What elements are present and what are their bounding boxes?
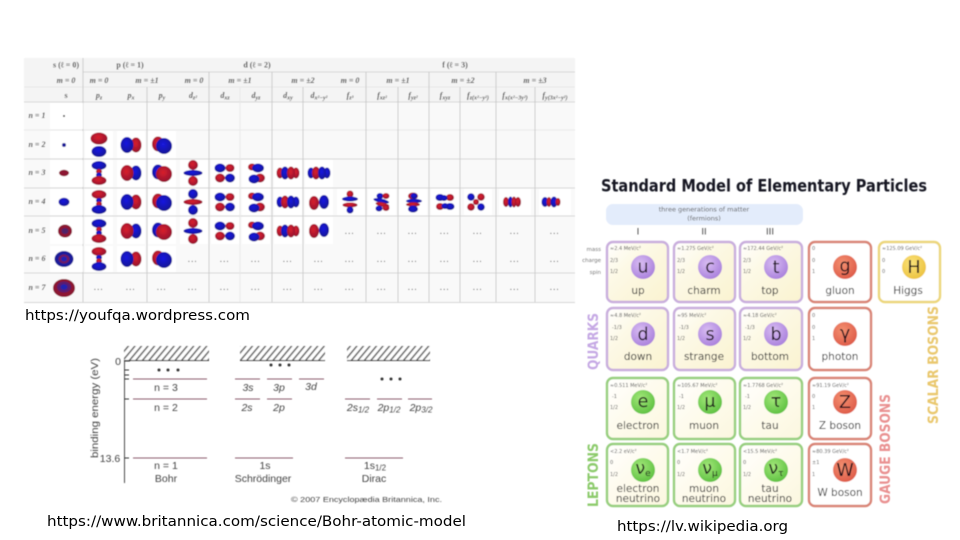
card: W boson: ±1	[812, 460, 819, 466]
table header: angular momentum and orbital names: y	[162, 96, 166, 102]
card: bottom quark: bottom	[751, 351, 789, 363]
row labels: principal quantum number n: n = 5	[28, 226, 46, 235]
ellipsis markers for unlisted orbitals: ...	[440, 256, 450, 264]
ellipsis markers for unlisted orbitals: ...	[251, 256, 261, 264]
ellipsis markers for unlisted orbitals: ...	[345, 228, 355, 236]
card: up quark: up	[631, 285, 645, 297]
property row labels: charge	[582, 258, 602, 264]
ellipsis markers for unlisted orbitals: ...	[473, 256, 483, 264]
card: tau neutrino: tau	[761, 483, 779, 495]
table header: angular momentum and orbital names: d	[220, 91, 224, 100]
card: muon neutrino: <1.7 MeV/c²	[677, 449, 708, 455]
table header: angular momentum and orbital names: s (ℓ = 0)	[53, 60, 79, 70]
energy axis	[89, 356, 130, 483]
ellipsis markers for unlisted orbitals: ...	[345, 256, 355, 264]
card: tau neutrino: ν	[768, 459, 778, 479]
table header: angular momentum and orbital names: m = ±2	[451, 76, 475, 85]
card: bottom quark: ≈4.18 GeV/c²	[743, 313, 777, 319]
Dirac column labels: Dirac	[362, 473, 386, 485]
table header: angular momentum and orbital names	[53, 60, 568, 102]
row labels: principal quantum number n: n = 1	[28, 111, 46, 120]
card: gluon: 0	[812, 258, 815, 264]
card: strange quark: 1/2	[677, 336, 685, 342]
Schrödinger column labels: Schrödinger	[235, 473, 292, 485]
card: tau neutrino	[740, 444, 802, 506]
card: top quark: 1/2	[743, 269, 751, 275]
card: gluon: g	[839, 256, 851, 276]
energy axis: binding energy (eV)	[89, 358, 101, 458]
card: photon: 1	[812, 336, 815, 342]
card: muon neutrino: μ	[712, 469, 718, 479]
card: W boson: ≈80.39 GeV/c²	[812, 449, 849, 455]
card: down quark: ≈4.8 MeV/c²	[610, 313, 641, 319]
card: muon: muon	[689, 420, 719, 432]
card: electron: -1	[612, 394, 617, 400]
card: W boson: 1	[812, 472, 815, 478]
Schrödinger column labels: 3d	[305, 381, 318, 393]
card: electron neutrino	[607, 444, 668, 506]
card: muon neutrino: 0	[677, 460, 680, 466]
table header: angular momentum and orbital names: xyz	[441, 96, 451, 102]
card: electron: e	[638, 392, 648, 412]
source caption: orbitals: https://youfqa.wordpress.com	[25, 308, 250, 324]
ellipsis markers for unlisted orbitals: ...	[126, 284, 136, 292]
Dirac column labels: 2p	[378, 402, 389, 414]
ellipsis markers for unlisted orbitals: ...	[473, 228, 483, 236]
card: gluon	[809, 242, 871, 302]
table header: angular momentum and orbital names: xy	[286, 96, 293, 102]
panel: Standard Model of Elementary Particles	[582, 176, 942, 507]
card: bottom quark: b	[770, 325, 782, 345]
ellipsis markers for unlisted orbitals: ...	[510, 228, 520, 236]
card: charm quark: charm	[687, 285, 721, 297]
card: top quark	[740, 242, 802, 302]
card: photon: γ	[840, 324, 850, 344]
card: Higgs boson	[879, 242, 940, 302]
ellipsis markers for unlisted orbitals: ...	[377, 256, 387, 264]
card: charm quark: ≈1.275 GeV/c²	[677, 246, 714, 252]
property row labels: mass	[587, 247, 601, 253]
table header: angular momentum and orbital names: m = ±2	[291, 76, 315, 85]
property row labels	[582, 247, 602, 276]
card: down quark	[607, 308, 668, 370]
category label: gauge bosons: GAUGE BOSONS	[878, 394, 894, 504]
energy axis: 0	[115, 356, 121, 368]
card: electron neutrino: 1/2	[610, 472, 618, 478]
Dirac column labels: 2p	[410, 402, 421, 414]
Dirac column labels: 1s	[364, 460, 375, 472]
card: Z boson: 1	[812, 405, 815, 411]
table header: angular momentum and orbital names: d (ℓ = 2)	[243, 60, 271, 70]
category label: quarks: QUARKS	[586, 313, 602, 370]
table header: angular momentum and orbital names: xz	[223, 96, 230, 102]
card: up quark: u	[637, 258, 649, 278]
ellipsis markers for unlisted orbitals: ...	[473, 284, 483, 292]
card: down quark: d	[637, 325, 649, 345]
table header: angular momentum and orbital names: m = ±1	[228, 76, 252, 85]
ellipsis markers for unlisted orbitals: ...	[345, 284, 355, 292]
card: photon: photon	[822, 351, 858, 363]
Bohr column labels: n = 1	[154, 460, 178, 472]
row labels: principal quantum number n: n = 4	[28, 197, 46, 206]
card: muon neutrino: muon	[689, 483, 719, 495]
table header: angular momentum and orbital names: f	[542, 91, 545, 100]
row labels: principal quantum number n: n = 7	[28, 283, 46, 292]
card: charm quark: 2/3	[677, 258, 685, 264]
table header: angular momentum and orbital names: m = ±3	[523, 76, 547, 85]
table header: angular momentum and orbital names: f	[467, 91, 470, 100]
ellipsis markers for unlisted orbitals: ...	[408, 284, 418, 292]
card: photon: 0	[812, 313, 815, 319]
card: electron neutrino: electron	[617, 483, 659, 495]
Bohr column labels	[154, 382, 178, 485]
generation numerals: I	[637, 228, 639, 238]
source caption: Wikipedia: https://lv.wikipedia.org	[617, 519, 788, 535]
table header: angular momentum and orbital names: z³	[348, 96, 354, 102]
copyright note: © 2007 Encyclopædia Britannica, Inc.	[291, 495, 442, 504]
table header: angular momentum and orbital names: f	[408, 91, 411, 100]
table header: angular momentum and orbital names: x	[130, 96, 134, 102]
card: electron	[607, 378, 668, 439]
card: electron neutrino: <2.2 eV/c²	[610, 449, 637, 455]
table header: angular momentum and orbital names: p (ℓ = 1)	[116, 60, 144, 70]
Dirac column labels: 1/2	[389, 406, 401, 414]
table header: angular momentum and orbital names: f	[502, 91, 505, 100]
ellipsis markers for unlisted orbitals: ...	[510, 284, 520, 292]
table header: angular momentum and orbital names: z	[99, 96, 103, 102]
property row labels: spin	[590, 270, 602, 276]
ellipsis markers for unlisted orbitals: ...	[283, 256, 293, 264]
card: down quark: down	[624, 351, 652, 363]
card: up quark: 2/3	[610, 258, 618, 264]
card: tau: 1/2	[743, 405, 751, 411]
card: Z boson: ≈91.19 GeV/c²	[812, 383, 849, 389]
card: electron: 1/2	[610, 405, 618, 411]
ellipsis markers for unlisted orbitals: ...	[408, 256, 418, 264]
card: top quark: t	[773, 258, 780, 278]
card: tau neutrino: neutrino	[748, 493, 792, 505]
card: gluon: 0	[812, 246, 815, 252]
category label: scalar bosons: SCALAR BOSONS	[926, 306, 942, 424]
row labels: principal quantum number n: n = 3	[28, 168, 46, 177]
card: bottom quark	[740, 308, 802, 370]
card: electron neutrino: ν	[635, 459, 645, 479]
generation numerals	[637, 228, 774, 238]
ellipsis markers for unlisted orbitals: ...	[157, 284, 167, 292]
row labels: principal quantum number n	[28, 111, 46, 292]
card: electron neutrino: neutrino	[616, 493, 660, 505]
table header: angular momentum and orbital names: d	[189, 91, 193, 100]
card: electron: electron	[617, 420, 659, 432]
card: tau neutrino: 1/2	[743, 472, 751, 478]
card: strange quark: s	[705, 325, 715, 345]
generation numerals: II	[701, 228, 707, 238]
card: top quark: 2/3	[743, 258, 751, 264]
table header: angular momentum and orbital names: m = ±1	[135, 76, 159, 85]
table header: angular momentum and orbital names: m = 0	[185, 76, 203, 85]
ellipsis markers for unlisted orbitals: ...	[94, 284, 104, 292]
energy level lines	[133, 364, 432, 458]
Dirac column labels: 3/2	[421, 406, 433, 414]
orbital shapes grid	[50, 103, 571, 297]
row labels: principal quantum number n: n = 6	[28, 254, 46, 263]
Bohr column labels: n = 3	[154, 382, 178, 394]
card: Higgs boson: ≈125.09 GeV/c²	[882, 246, 922, 252]
card: Z boson	[809, 378, 871, 439]
card: Higgs boson: 0	[882, 269, 885, 275]
card: up quark	[607, 242, 668, 302]
ellipsis markers for unlisted orbitals: ...	[440, 284, 450, 292]
card: W boson: W	[836, 461, 854, 481]
ellipsis markers for unlisted orbitals: ...	[377, 284, 387, 292]
card: Z boson: 0	[812, 394, 815, 400]
card: electron neutrino: 0	[610, 460, 613, 466]
category label: leptons: LEPTONS	[586, 443, 602, 507]
table header: angular momentum and orbital names: x²−y²	[314, 96, 328, 102]
ellipsis markers for unlisted orbitals: ...	[220, 256, 230, 264]
Bohr column labels: n = 2	[154, 402, 178, 414]
card: top quark: top	[761, 285, 779, 297]
ellipsis markers for unlisted orbitals: ...	[550, 256, 560, 264]
Bohr column labels: Bohr	[155, 473, 178, 485]
table header: angular momentum and orbital names: s	[64, 91, 68, 100]
Dirac column labels: 1/2	[358, 406, 370, 414]
card: muon	[674, 378, 735, 439]
card: down quark: 1/2	[610, 336, 618, 342]
panel: hydrogen energy level diagram	[89, 346, 442, 504]
card: Higgs boson: Higgs	[893, 285, 923, 297]
source caption: Britannica: https://www.britannica.com/science/Bohr-atomic-model	[47, 514, 466, 530]
table header: angular momentum and orbital names: d	[252, 91, 256, 100]
card: gluon: gluon	[825, 285, 855, 297]
card: strange quark	[674, 308, 735, 370]
row labels: principal quantum number n: n = 2	[28, 140, 46, 149]
Schrödinger column labels	[235, 381, 318, 485]
Dirac column labels: 2s	[347, 402, 358, 414]
ellipsis markers for unlisted orbitals: ...	[220, 284, 230, 292]
table header: angular momentum and orbital names: m = 0	[90, 76, 108, 85]
table header: angular momentum and orbital names: y(3x²−y²)	[544, 94, 568, 102]
table header: angular momentum and orbital names: p	[128, 91, 132, 100]
generations banner	[606, 204, 803, 225]
generations banner: (fermions)	[687, 214, 721, 222]
ellipsis markers for unlisted orbitals: ...	[440, 228, 450, 236]
ellipsis markers for unlisted orbitals	[94, 228, 560, 292]
card: muon: -1	[679, 394, 684, 400]
card: tau neutrino: 0	[743, 460, 746, 466]
card: bottom quark: -1/3	[745, 325, 755, 331]
Dirac column labels	[346, 402, 433, 485]
table header: angular momentum and orbital names: f	[347, 91, 349, 100]
energy axis: 13.6	[100, 453, 120, 465]
card: Higgs boson: H	[907, 258, 921, 278]
table header: angular momentum and orbital names: z(x²−y²)	[469, 94, 489, 102]
card: bottom quark: 1/2	[743, 336, 751, 342]
table header: angular momentum and orbital names: f	[440, 91, 442, 100]
card: charm quark	[674, 242, 735, 302]
table header: angular momentum and orbital names: m = 0	[57, 76, 75, 85]
ellipsis markers for unlisted orbitals: ...	[251, 284, 261, 292]
Schrödinger column labels: 1s	[259, 460, 271, 472]
panel: hydrogen atomic orbitals table	[24, 58, 575, 303]
ellipsis markers for unlisted orbitals: ...	[314, 284, 324, 292]
card: charm quark: 1/2	[677, 269, 685, 275]
table header: angular momentum and orbital names: xz²	[379, 96, 387, 102]
table header: angular momentum and orbital names: d	[311, 91, 315, 100]
card: muon: 1/2	[677, 405, 685, 411]
table header: angular momentum and orbital names: p	[159, 91, 163, 100]
table header: angular momentum and orbital names: z²	[192, 96, 197, 102]
card: muon neutrino: ν	[702, 459, 712, 479]
table header: angular momentum and orbital names: yz	[254, 96, 261, 102]
card: photon: 0	[812, 325, 815, 331]
card: electron: ≈0.511 MeV/c²	[610, 383, 647, 389]
card: strange quark: -1/3	[679, 325, 689, 331]
card: strange quark: ≈95 MeV/c²	[677, 313, 706, 319]
card: top quark: ≈172.44 GeV/c²	[743, 246, 783, 252]
card: strange quark: strange	[684, 351, 724, 363]
Schrödinger column labels: 2p	[272, 402, 285, 414]
table header: angular momentum and orbital names: p	[96, 91, 100, 100]
card: Z boson: Z	[839, 393, 851, 413]
card: tau neutrino: τ	[778, 469, 784, 479]
card: charm quark: c	[705, 258, 715, 278]
ellipsis markers for unlisted orbitals: ...	[314, 256, 324, 264]
table header: angular momentum and orbital names: m = 0	[341, 76, 359, 85]
card: W boson	[809, 444, 871, 506]
card: tau: ≈1.7768 GeV/c²	[743, 383, 783, 389]
table header: angular momentum and orbital names: f	[377, 91, 380, 100]
card: tau: tau	[761, 420, 779, 432]
generation numerals: III	[766, 228, 774, 238]
table header: angular momentum and orbital names: d	[283, 91, 287, 100]
ellipsis markers for unlisted orbitals: ...	[550, 228, 560, 236]
ellipsis markers for unlisted orbitals: ...	[550, 284, 560, 292]
Schrödinger column labels: 3p	[273, 382, 285, 394]
ellipsis markers for unlisted orbitals: ...	[188, 284, 198, 292]
card: muon neutrino	[674, 444, 735, 506]
card: down quark: -1/3	[612, 325, 622, 331]
card: tau: -1	[745, 394, 750, 400]
ellipsis markers for unlisted orbitals: ...	[377, 228, 387, 236]
table header: angular momentum and orbital names: x(x²−3y²)	[504, 94, 528, 102]
ellipsis markers for unlisted orbitals: ...	[408, 228, 418, 236]
hatched continuum bands	[124, 346, 430, 360]
card: tau	[740, 378, 802, 439]
card: Higgs boson: 0	[882, 258, 885, 264]
card: Z boson: Z boson	[819, 420, 861, 432]
Schrödinger column labels: 2s	[240, 402, 253, 414]
Schrödinger column labels: 3s	[242, 382, 254, 394]
table header: angular momentum and orbital names: yz²	[410, 96, 418, 102]
card: electron neutrino: e	[645, 469, 651, 479]
card: muon neutrino: 1/2	[677, 472, 685, 478]
card: photon	[809, 308, 871, 370]
card: muon neutrino: neutrino	[682, 493, 726, 505]
ellipsis markers for unlisted orbitals: ...	[283, 284, 293, 292]
card: up quark: ≈2.4 MeV/c²	[610, 246, 641, 252]
table header: angular momentum and orbital names: m = ±1	[386, 76, 410, 85]
card: tau neutrino: <15.5 MeV/c²	[743, 449, 777, 455]
ellipsis markers for unlisted orbitals: ...	[188, 256, 198, 264]
card: gluon: 1	[812, 269, 815, 275]
card: tau: τ	[771, 392, 781, 412]
generations banner: three generations of matter	[659, 206, 750, 214]
card: up quark: 1/2	[610, 269, 618, 275]
ellipsis markers for unlisted orbitals: ...	[510, 256, 520, 264]
Dirac column labels: 1/2	[375, 464, 387, 472]
card: muon: ≈105.67 MeV/c²	[677, 383, 718, 389]
card: muon: μ	[704, 392, 716, 412]
card: W boson: W boson	[817, 487, 863, 499]
table header: angular momentum and orbital names: f (ℓ = 3)	[442, 60, 468, 70]
